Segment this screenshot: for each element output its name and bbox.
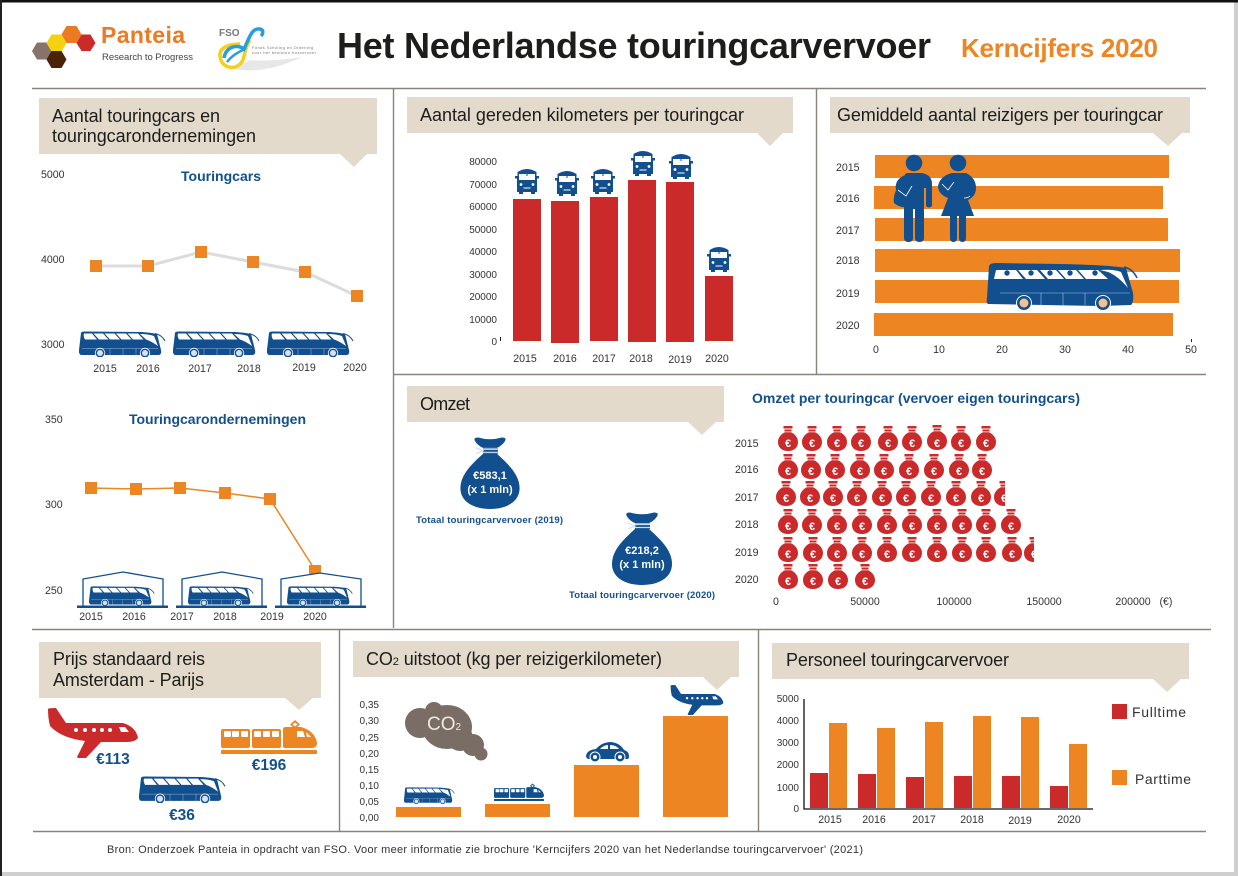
chart: touringcars line: 5000	[41, 169, 65, 181]
logo: Panteia: Research to Progress	[102, 52, 193, 63]
bar chart: kilometers: 10000	[469, 315, 497, 326]
chart: touringcarondernemingen line: 250	[45, 585, 63, 597]
bar chart: reizigers: 2016	[836, 193, 860, 205]
pictogram chart: money bags: €€€€	[785, 576, 868, 588]
chart: touringcars line: 3000	[41, 339, 65, 351]
bar chart: personeel: 3000	[777, 738, 799, 749]
chart: touringcarondernemingen line: 2015	[79, 611, 103, 623]
logo: FSO: FSO	[219, 28, 240, 39]
label: totaal 2020: Totaal touringcarvervoer (2020)	[569, 590, 715, 601]
heading	[407, 97, 793, 146]
bar chart: reizigers: 2018	[836, 255, 860, 267]
bar chart: kilometers	[469, 151, 733, 366]
panel: CO2	[353, 641, 739, 824]
heading: Gemiddeld aantal reizigers per touringcar	[837, 105, 1163, 125]
subtitle: Kerncijfers 2020	[961, 33, 1158, 63]
pictogram chart: money bags: 2016	[735, 464, 759, 476]
icon: car	[586, 742, 629, 762]
chart: touringcars line: 2017	[188, 363, 212, 375]
bar chart: personeel: 2017	[912, 814, 936, 826]
bar chart: kilometers: 0	[491, 337, 497, 348]
bar chart: CO2: 0,30	[360, 716, 379, 727]
bar chart: personeel: 2018	[960, 814, 984, 826]
icon: money bag 2019	[460, 437, 520, 509]
heading: Personeel touringcarvervoer	[786, 650, 1009, 670]
bar chart: CO2: 0,15	[360, 765, 379, 776]
pictogram chart: money bags: (€)	[1160, 596, 1172, 608]
bar chart: personeel: 2000	[777, 760, 799, 771]
heading: Omzet per touringcar (vervoer eigen touringcars)	[752, 390, 1080, 406]
pictogram chart: money bags: 100000	[936, 596, 972, 608]
bar chart: kilometers: 2019	[668, 354, 692, 366]
heading: Aantal touringcars en	[52, 106, 220, 126]
icon: woman with backpack	[938, 155, 976, 242]
pictogram chart: money bags: €€€€€€€€€	[783, 493, 984, 505]
pictogram chart: money bags: €€€€€€€€€€	[785, 549, 1015, 561]
pictogram chart: money bags: 2017	[735, 492, 759, 504]
bar chart: kilometers: 2017	[592, 353, 616, 365]
bar chart: reizigers: 10	[933, 344, 945, 356]
icon: CO2 cloud	[405, 702, 488, 760]
heading: Prijs standaard reis	[53, 649, 205, 669]
bar chart: kilometers: 50000	[469, 225, 497, 236]
heading	[407, 386, 724, 435]
pictogram chart: money bags: 0	[773, 596, 779, 608]
logo: FSO: voor het besloten busvervoer	[252, 50, 317, 55]
chart: touringcars line: 2016	[136, 363, 160, 375]
bar chart: CO2: 0,05	[360, 797, 379, 808]
pictogram chart: money bags: €€€€€€€€€	[785, 466, 985, 478]
bar chart: CO2: 0,10	[360, 781, 379, 792]
pictogram chart: money bags: 2019	[735, 547, 759, 559]
heading: touringcarondernemingen	[52, 126, 256, 146]
bar chart: reizigers: 0	[873, 344, 879, 356]
pictogram chart: money bags: 50000	[850, 596, 880, 608]
title: Het Nederlandse touringcarvervoer	[337, 25, 931, 66]
bar chart: personeel: 1000	[777, 783, 799, 794]
heading	[353, 641, 739, 690]
icon: plane €113	[48, 708, 138, 768]
pictogram chart: money bags	[735, 425, 1172, 608]
bar chart: personeel: 0	[793, 804, 799, 815]
bar chart: personeel: 2016	[862, 814, 886, 826]
icon: money bag 2020: €218,2	[625, 545, 659, 557]
bar chart: CO2: 0,20	[360, 749, 379, 760]
chart: touringcarondernemingen line	[45, 411, 366, 623]
pictogram chart: money bags: 2018	[735, 519, 759, 531]
pictogram chart: money bags: 150000	[1026, 596, 1062, 608]
bar chart: kilometers: 40000	[469, 247, 497, 258]
legend: Parttime	[1135, 771, 1191, 787]
panel: aantal touringcars en ondernemingen	[39, 98, 377, 623]
heading	[772, 643, 1189, 692]
bar chart: reizigers: 50	[1185, 344, 1197, 356]
chart: touringcarondernemingen line: 2020	[303, 611, 327, 623]
icon: train €196: €196	[252, 757, 287, 774]
bar chart: kilometers: 2016	[553, 353, 577, 365]
panel: personeel	[772, 643, 1191, 827]
bar chart: personeel	[777, 694, 1093, 827]
bar chart: kilometers: 60000	[469, 202, 497, 213]
pictogram chart: money bags: 2020	[735, 574, 759, 586]
bar chart: reizigers: 40	[1122, 344, 1134, 356]
pictogram chart: money bags: 200000	[1115, 596, 1151, 608]
legend	[1112, 704, 1191, 787]
logo: Panteia	[32, 22, 193, 68]
bar chart: CO2: 0,25	[360, 733, 379, 744]
heading	[39, 98, 377, 167]
pictogram chart: money bags: €	[1001, 493, 1007, 505]
bar chart: CO2	[360, 700, 728, 824]
icon: plane €113: €113	[96, 751, 130, 768]
icon: train €196	[221, 720, 317, 774]
icon: coach €36	[139, 777, 225, 824]
bar chart: reizigers: 20	[996, 344, 1008, 356]
chart: touringcars line: Touringcars	[181, 168, 261, 184]
panel: omzet	[407, 386, 724, 601]
pictogram chart: money bags: €€€€€€€€€€	[785, 521, 1014, 533]
icon: money bag 2019: (x 1 mln)	[467, 484, 513, 496]
panel: kilometers	[407, 97, 793, 366]
chart: touringcarondernemingen line: 350	[45, 414, 63, 426]
legend: Fulltime	[1132, 704, 1186, 720]
chart: touringcarondernemingen line: 2018	[213, 611, 237, 623]
logo: Panteia: Panteia	[101, 22, 185, 48]
heading: Omzet	[420, 394, 470, 414]
source note: Bron: Onderzoek Panteia in opdracht van FSO. Voor meer informatie zie brochure 'Kerncijfers 2020 van het Nederlandse touringcarvervoer' (2021)	[107, 844, 863, 856]
bar chart: reizigers: 2020	[836, 320, 860, 332]
bar chart: kilometers: 30000	[469, 270, 497, 281]
bar chart: reizigers: 2017	[836, 225, 860, 237]
heading: CO2 uitstoot (kg per reizigerkilometer)	[366, 649, 662, 669]
chart: touringcars line: 2015	[93, 363, 117, 375]
panel: omzet per touringcar	[735, 390, 1172, 608]
bar chart: kilometers: 20000	[469, 292, 497, 303]
icon: train	[494, 784, 544, 801]
heading: Aantal gereden kilometers per touringcar	[420, 105, 744, 125]
heading: Amsterdam - Parijs	[53, 670, 204, 690]
pictogram chart: money bags: 2015	[735, 438, 759, 450]
icon: coach €36: €36	[169, 807, 195, 824]
chart: touringcars line: 2020	[343, 362, 367, 374]
chart: touringcarondernemingen line: 2017	[170, 611, 194, 623]
bar chart: kilometers: 80000	[469, 157, 497, 168]
chart: touringcarondernemingen line: 300	[45, 499, 63, 511]
bar chart: kilometers: 70000	[469, 180, 497, 191]
heading	[830, 97, 1190, 146]
icon: CO2 cloud: CO2	[427, 714, 462, 735]
pictogram chart: money bags: €	[1031, 549, 1037, 561]
bar chart: personeel: 5000	[777, 694, 799, 705]
bar chart: personeel: 2020	[1057, 814, 1081, 826]
logo: FSO	[219, 28, 317, 70]
bar chart: reizigers: 30	[1059, 344, 1071, 356]
icon: money bag 2020: (x 1 mln)	[619, 559, 665, 571]
icon: plane	[671, 685, 723, 715]
chart: touringcarondernemingen line: 2019	[260, 611, 284, 623]
panel: prijs	[39, 642, 321, 824]
pictogram chart: money bags: €€€€€€€€€	[785, 438, 989, 450]
bar chart: personeel: 2015	[818, 814, 842, 826]
heading	[39, 642, 321, 710]
chart: touringcars line: 2018	[237, 363, 261, 375]
chart: touringcars line: 4000	[41, 254, 65, 266]
chart: touringcars line	[41, 168, 367, 375]
icon: man with backpack	[894, 155, 932, 242]
icon: money bag 2019: €583,1	[473, 470, 507, 482]
bar chart: kilometers: 2020	[705, 353, 729, 365]
icon: coach	[404, 787, 454, 805]
chart: touringcarondernemingen line: 2016	[122, 611, 146, 623]
bar chart: CO2: 0,00	[360, 813, 379, 824]
panel: reizigers	[830, 97, 1197, 356]
bar chart: reizigers: 2015	[836, 162, 860, 174]
bar chart: CO2: 0,35	[360, 700, 379, 711]
chart: touringcarondernemingen line: Touringcarondernemingen	[129, 411, 306, 427]
logo: FSO: Fonds Scholing en Ordening	[252, 45, 313, 50]
bar chart: personeel: 4000	[777, 716, 799, 727]
chart: touringcars line: 2019	[292, 362, 316, 374]
bar chart: reizigers: 2019	[836, 288, 860, 300]
bar chart: personeel: 2019	[1008, 815, 1032, 827]
bar chart: reizigers	[836, 155, 1197, 356]
icon: money bag 2020	[612, 512, 672, 585]
label: totaal 2019: Totaal touringcarvervoer (2019)	[416, 515, 563, 526]
bar chart: kilometers: 2015	[513, 353, 537, 365]
bar chart: kilometers: 2018	[629, 353, 653, 365]
icon: coach with passengers	[987, 263, 1137, 310]
